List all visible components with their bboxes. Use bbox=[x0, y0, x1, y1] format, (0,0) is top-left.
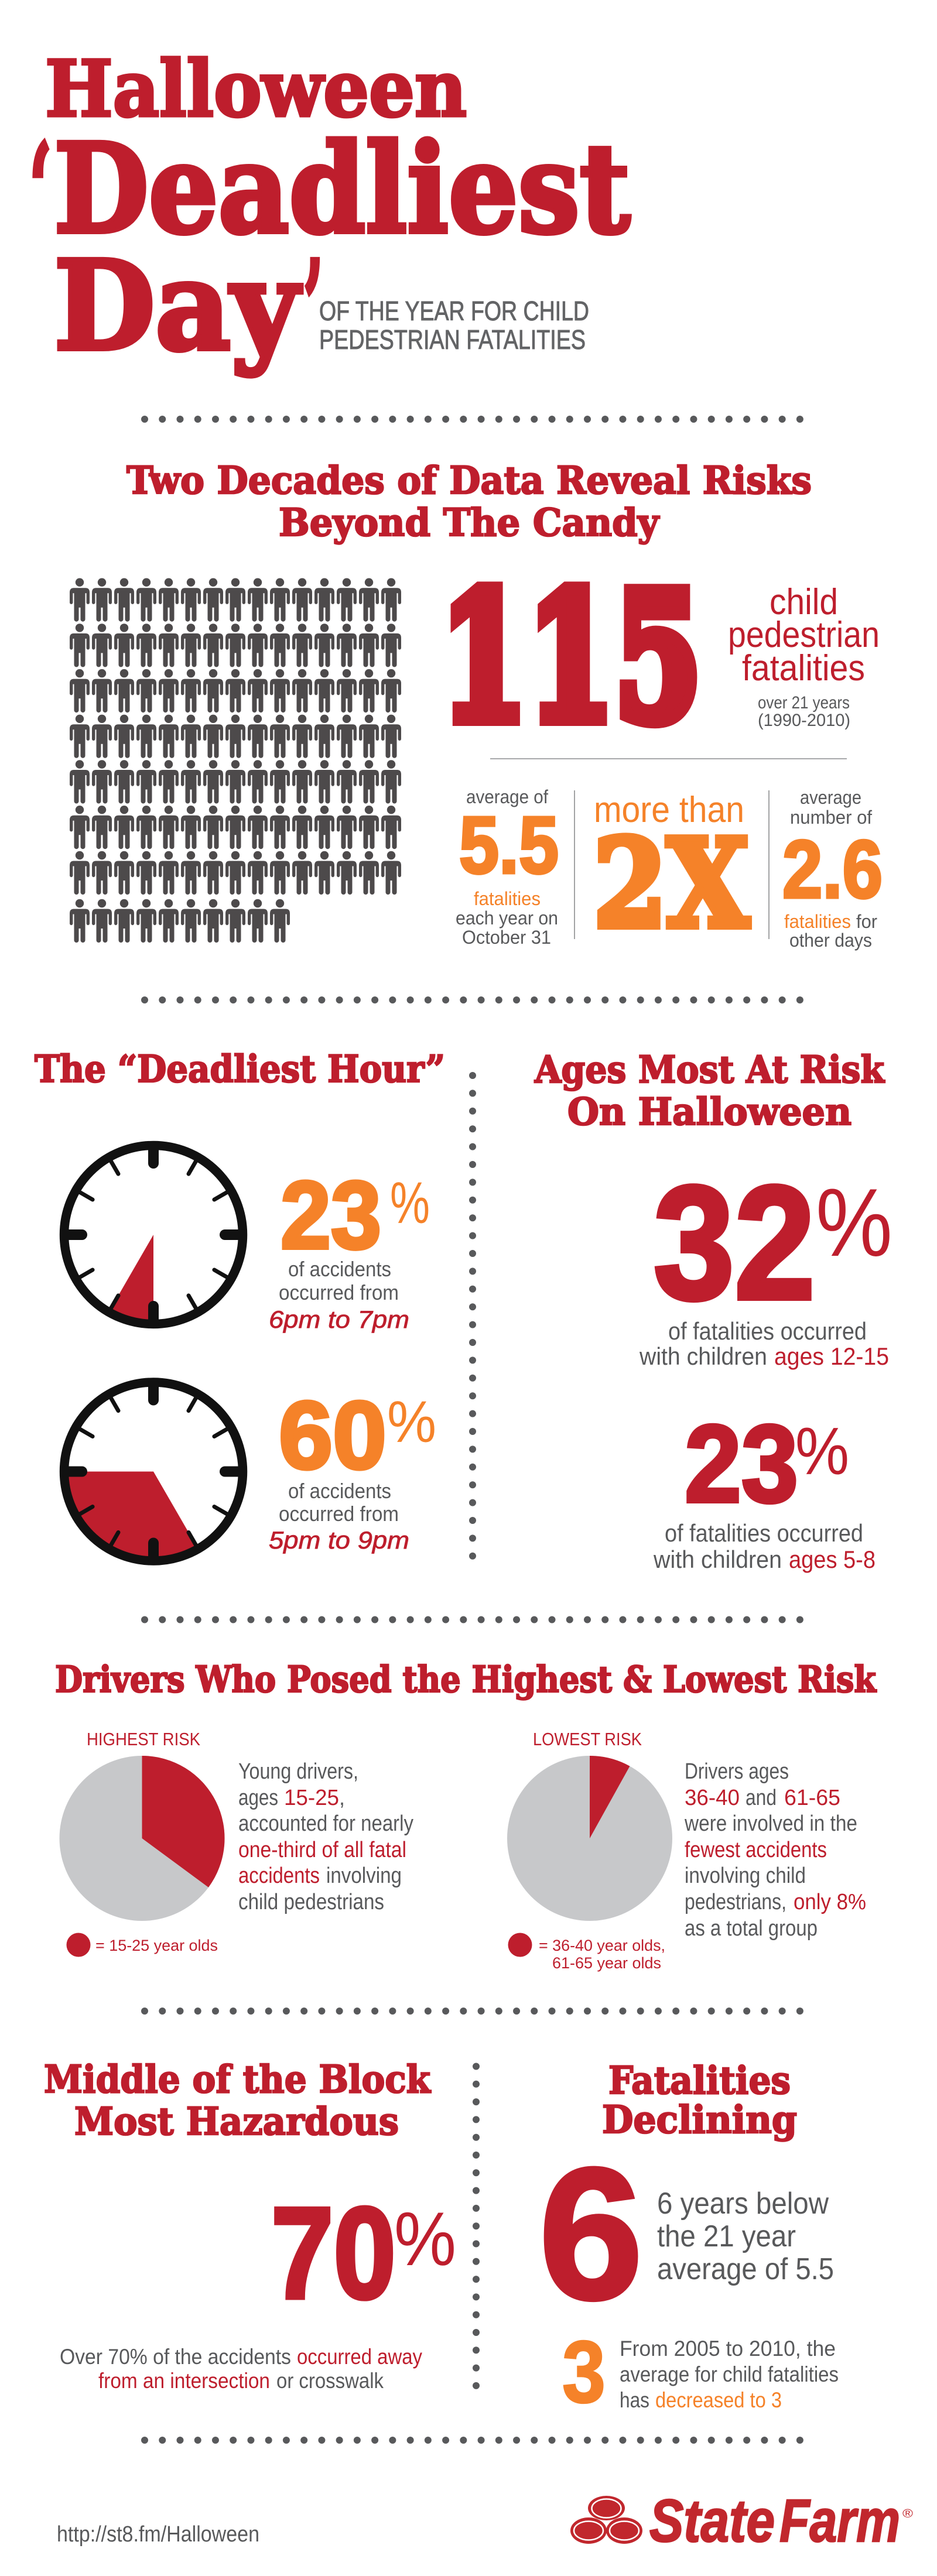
stat: decreased to 3: 3 bbox=[562, 2322, 606, 2421]
big number 115: 115 bbox=[440, 554, 702, 761]
label: highest risk: HIGHEST RISK bbox=[87, 1729, 200, 1749]
stat: 2.6 other days: fatalities bbox=[784, 911, 851, 932]
stat: 23 percent 6pm to 7pm: % bbox=[390, 1170, 430, 1236]
text: drivers ages: only 8% bbox=[794, 1890, 866, 1914]
pie chart: 36-40 and 61-65 year olds bbox=[507, 1756, 672, 1921]
text: young drivers: , bbox=[339, 1786, 345, 1810]
stat: 23 percent 6pm to 7pm: occurred from bbox=[279, 1280, 399, 1304]
stat: 32 percent ages 12-15: % bbox=[816, 1169, 892, 1276]
stat: 32 percent ages 12-15: ages 12-15 bbox=[774, 1342, 889, 1370]
stat: 60 percent 5pm to 9pm: 60 bbox=[279, 1382, 387, 1489]
text: young drivers: accidents bbox=[238, 1864, 320, 1888]
text: drivers ages: Drivers ages bbox=[685, 1759, 789, 1784]
text: young drivers: 15-25 bbox=[284, 1786, 339, 1810]
stat: 23 percent ages 5-8: ages 5-8 bbox=[789, 1546, 876, 1573]
stat: decreased to 3: From 2005 to 2010, the bbox=[620, 2337, 836, 2361]
stat: more than 2X: 2X bbox=[593, 813, 749, 955]
stat: 2.6 other days: average bbox=[800, 787, 861, 808]
text: young drivers: accounted for nearly bbox=[238, 1811, 413, 1836]
subtitle: PEDESTRIAN FATALITIES bbox=[319, 324, 586, 355]
title: ‘ bbox=[29, 117, 52, 261]
icon: three ovals bbox=[570, 2496, 642, 2544]
stat: 23 percent 6pm to 7pm: of accidents bbox=[288, 1257, 391, 1281]
text: drivers ages: as a total group bbox=[685, 1916, 818, 1941]
stat: 23 percent 6pm to 7pm: 23 bbox=[281, 1162, 381, 1269]
subtitle bbox=[319, 296, 589, 355]
panel: highest risk bbox=[60, 1729, 413, 1957]
heading: middle of the block bbox=[44, 2057, 432, 2144]
text: child pedestrian fatalities: fatalities bbox=[742, 648, 865, 688]
title bbox=[29, 44, 630, 378]
stat: decreased to 3: average for child fatalities bbox=[620, 2362, 839, 2386]
stat: 5.5 average: 5.5 bbox=[459, 800, 559, 890]
stat: 6 years: 6 years below bbox=[657, 2187, 829, 2221]
wordmark: Farm bbox=[779, 2487, 900, 2554]
heading: fatalities declining: Fatalities bbox=[608, 2058, 791, 2103]
text: young drivers: Young drivers, bbox=[238, 1759, 358, 1784]
heading: middle of the block: Middle of the Block bbox=[44, 2057, 432, 2102]
legend: 15-25 year olds bbox=[67, 1933, 218, 1957]
stat: 5.5 average: average of bbox=[466, 786, 548, 807]
text: over 21 years: over 21 years bbox=[758, 693, 850, 712]
heading: ages most at risk: On Halloween bbox=[567, 1090, 851, 1134]
text: over 70 percent bbox=[60, 2345, 422, 2393]
pie chart: 15-25 year olds bbox=[60, 1756, 225, 1921]
heading: fatalities declining bbox=[602, 2058, 797, 2142]
text: young drivers: one-third of all fatal bbox=[238, 1838, 406, 1862]
legend: 36-40 and 61-65 year olds: 61-65 year olds bbox=[552, 1954, 661, 1972]
legend: 15-25 year olds: = 15-25 year olds bbox=[95, 1937, 218, 1954]
wordmark bbox=[649, 2487, 900, 2554]
stat: 23 percent ages 5-8: of fatalities occurred bbox=[665, 1519, 863, 1547]
heading: two decades: Two Decades of Data Reveal Risks bbox=[126, 458, 812, 503]
clock: 6pm to 7pm bbox=[64, 1145, 242, 1324]
stat: 23 percent ages 5-8 bbox=[653, 1402, 876, 1573]
stat: 32 percent ages 12-15: 32 bbox=[654, 1153, 815, 1333]
stat: 6 years: the 21 year bbox=[657, 2219, 796, 2253]
text: child pedestrian fatalities: pedestrian bbox=[728, 615, 880, 655]
stat: 23 percent ages 5-8: % bbox=[795, 1414, 849, 1489]
stat: 2.6 other days bbox=[782, 787, 883, 951]
stat: 5.5 average: fatalities bbox=[474, 888, 541, 909]
text: drivers ages bbox=[684, 1759, 866, 1941]
text: young drivers bbox=[238, 1759, 413, 1914]
stat: 2.6 other days: number of bbox=[790, 807, 872, 828]
heading: fatalities declining: Declining bbox=[602, 2098, 797, 2142]
stat: 60 percent 5pm to 9pm: occurred from bbox=[279, 1502, 399, 1526]
logo: State Farm bbox=[570, 2487, 913, 2554]
stat: 32 percent ages 12-15 bbox=[639, 1153, 892, 1370]
text: young drivers: child pedestrians bbox=[238, 1890, 384, 1914]
text: child pedestrian fatalities bbox=[728, 582, 880, 688]
stat: 32 percent ages 12-15: of fatalities occurred bbox=[668, 1317, 867, 1345]
stat: 23 percent ages 5-8: 23 bbox=[685, 1402, 798, 1525]
label: lowest risk: LOWEST RISK bbox=[533, 1729, 642, 1749]
text: over 70 percent: occurred away bbox=[297, 2345, 422, 2369]
heading: two decades: Beyond The Candy bbox=[279, 501, 660, 545]
wordmark: State bbox=[649, 2487, 775, 2554]
pictogram: 115 people bbox=[70, 578, 401, 943]
title: ’ bbox=[303, 234, 323, 378]
stat: 60 percent 5pm to 9pm: 5pm to 9pm bbox=[269, 1526, 409, 1554]
stat: 5.5 average: each year on bbox=[456, 907, 558, 929]
title: Halloween bbox=[45, 44, 467, 135]
stat: 2.6 other days: for bbox=[856, 911, 877, 932]
text: child pedestrian fatalities: child bbox=[770, 582, 838, 622]
clock: 5pm to 9pm bbox=[64, 1382, 242, 1561]
text: drivers ages: and bbox=[746, 1786, 777, 1810]
stat: decreased to 3: decreased to 3 bbox=[655, 2388, 782, 2412]
text: over 21 years bbox=[758, 693, 850, 730]
stat: 70 percent: 70 bbox=[271, 2181, 396, 2326]
footer url: http://st8.fm/Halloween bbox=[57, 2522, 259, 2547]
text: drivers ages: pedestrians, bbox=[685, 1890, 786, 1914]
heading: two decades bbox=[126, 458, 812, 545]
heading: ages most at risk bbox=[534, 1048, 885, 1134]
stat: 60 percent 5pm to 9pm: % bbox=[387, 1389, 436, 1455]
text: drivers ages: 61-65 bbox=[784, 1786, 840, 1810]
stat: 6 years bbox=[539, 2129, 834, 2338]
legend: 36-40 and 61-65 year olds bbox=[508, 1933, 665, 1972]
stat: more than 2X: more than bbox=[594, 790, 744, 830]
heading: deadliest hour: The “Deadliest Hour” bbox=[35, 1047, 445, 1091]
text: young drivers: ages bbox=[238, 1786, 278, 1810]
legend: 36-40 and 61-65 year olds: = 36-40 year olds, bbox=[539, 1937, 665, 1954]
title: Day bbox=[54, 234, 302, 378]
stat: decreased to 3 bbox=[562, 2322, 839, 2421]
stat: 5.5 average bbox=[456, 786, 559, 948]
heading: middle of the block: Most Hazardous bbox=[74, 2099, 399, 2144]
stat: 60 percent 5pm to 9pm bbox=[269, 1382, 436, 1554]
stat: 6 years: 6 bbox=[539, 2129, 643, 2338]
text: drivers ages: 36-40 bbox=[685, 1786, 740, 1810]
text: drivers ages: involving child bbox=[685, 1864, 806, 1888]
text: drivers ages: fewest accidents bbox=[685, 1838, 827, 1862]
stat: 2.6 other days: other days bbox=[789, 930, 872, 951]
stat: 32 percent ages 12-15: with children bbox=[639, 1342, 767, 1370]
text: over 21 years: (1990-2010) bbox=[758, 711, 850, 730]
stat: 2.6 other days: 2.6 bbox=[782, 823, 883, 915]
title: Deadliest bbox=[54, 117, 630, 261]
heading: ages most at risk: Ages Most At Risk bbox=[534, 1048, 885, 1092]
text: drivers ages: were involved in the bbox=[684, 1811, 857, 1836]
stat: 6 years: average of 5.5 bbox=[657, 2252, 834, 2286]
stat: 23 percent 6pm to 7pm: 6pm to 7pm bbox=[269, 1306, 409, 1333]
stat: 70 percent: % bbox=[394, 2196, 456, 2282]
panel: lowest risk bbox=[507, 1729, 866, 1972]
text: over 70 percent: or crosswalk bbox=[276, 2369, 384, 2393]
stat: 60 percent 5pm to 9pm: of accidents bbox=[288, 1479, 391, 1503]
text: over 70 percent: Over 70% of the accidents bbox=[60, 2345, 291, 2369]
stat: 23 percent ages 5-8: with children bbox=[653, 1546, 782, 1573]
stat: 23 percent 6pm to 7pm bbox=[269, 1162, 430, 1333]
registered mark: ® bbox=[902, 2508, 913, 2520]
stat: decreased to 3: has bbox=[620, 2388, 649, 2412]
text: young drivers: involving bbox=[326, 1864, 402, 1888]
stat: 5.5 average: October 31 bbox=[462, 927, 551, 948]
text: over 70 percent: from an intersection bbox=[98, 2369, 270, 2393]
subtitle: OF THE YEAR FOR CHILD bbox=[319, 296, 589, 326]
